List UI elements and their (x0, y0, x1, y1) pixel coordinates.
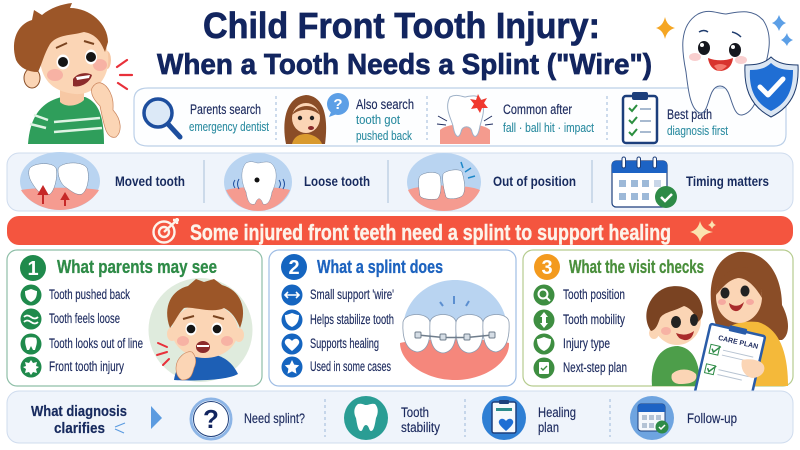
bullet: tooth looks out of line (20, 334, 143, 354)
text: parents search (189, 102, 269, 134)
icon: loose tooth (224, 153, 292, 211)
icon: pain lines (117, 60, 132, 89)
label: moved tooth: Moved tooth (115, 173, 185, 189)
icon: out of position tooth (407, 153, 481, 211)
bullet: supports healing (282, 334, 379, 354)
icon: healing plan (482, 396, 526, 440)
bullet: used in some cases: Used in some cases (310, 359, 391, 374)
illustration: boy holding cheek (14, 3, 120, 144)
bullet: injury type: Injury type (563, 336, 610, 351)
label: healing plan: plan (538, 420, 559, 435)
text: common after (503, 102, 594, 135)
panel 2: what a splint does (269, 250, 516, 386)
text: best path: Best path (667, 107, 712, 122)
text: common after: Common after (503, 102, 572, 117)
icon: checklist clipboard (623, 92, 657, 143)
icon: tooth mascot with shield (683, 11, 798, 117)
bullet: tooth position: Tooth position (563, 287, 625, 302)
heading (31, 403, 127, 437)
text: parents search: Parents search (190, 102, 261, 117)
illustration: splinted teeth (400, 280, 509, 380)
label: tooth stability: Tooth (401, 405, 429, 420)
banner (7, 216, 793, 245)
illustration: worried mother with question bubble (284, 93, 349, 144)
label: loose tooth: Loose tooth (304, 173, 370, 189)
title: When a Tooth Needs a Splint ("Wire") (157, 49, 652, 81)
illustration: worried mother with question bubble: ? (333, 96, 343, 113)
illustration: mother and child with care plan: CARE PLAN (717, 335, 759, 351)
icon: moved tooth (20, 152, 100, 210)
text: also search: tooth got (356, 112, 400, 127)
text: best path (667, 107, 728, 138)
illustration: boy with tooth injury (148, 278, 252, 382)
bullet: used in some cases (282, 356, 391, 378)
panel 1: what parents may see (7, 250, 262, 386)
badge 2: 2 (288, 257, 300, 279)
banner message: Some injured front teeth need a splint to support healing (190, 220, 671, 245)
badge 3: 3 (541, 257, 553, 279)
bullet: helps stabilize tooth: Helps stabilize tooth (310, 312, 394, 327)
icon: question (191, 399, 231, 439)
heading: What the visit checks (569, 257, 704, 277)
bullet: tooth pushed back: Tooth pushed back (49, 287, 130, 302)
icon: target (154, 218, 179, 242)
illustration: mother and child with care plan (646, 252, 788, 406)
label: follow-up: Follow-up (687, 411, 737, 426)
bullet: front tooth injury (20, 356, 124, 378)
icon: magnifier (144, 99, 180, 137)
label: out of position: Out of position (493, 173, 576, 189)
bullet: next-step plan (534, 358, 627, 378)
bullet: helps stabilize tooth (282, 310, 394, 330)
label: tooth stability: stability (401, 420, 440, 435)
text: also search (356, 97, 414, 143)
heading: What diagnosis (31, 403, 127, 420)
bullet: tooth mobility: Tooth mobility (563, 312, 625, 327)
panel: search and context strip (134, 88, 786, 146)
panel 3: what the visit checks (523, 250, 793, 406)
panel: signs strip (7, 152, 793, 211)
label: need splint: Need splint? (244, 411, 305, 426)
icon: impacted tooth (437, 94, 493, 144)
title (157, 5, 652, 81)
bullet: tooth feels loose: Tooth feels loose (49, 311, 120, 326)
icon: sparkles (656, 15, 793, 46)
icon: tooth (344, 396, 388, 440)
heading: What parents may see (57, 257, 217, 277)
bullet: next-step plan: Next-step plan (563, 360, 627, 375)
bullet: tooth position (534, 284, 625, 306)
icon: question: ? (203, 404, 219, 434)
label: healing plan: Healing (538, 405, 576, 420)
text: also search: Also search (356, 97, 414, 112)
bullet: injury type (534, 334, 610, 354)
bullet: tooth mobility (534, 310, 625, 330)
label: tooth stability (401, 405, 440, 435)
text: also search: pushed back (356, 128, 412, 143)
label: healing plan (538, 405, 576, 435)
icon: arrow (151, 406, 162, 429)
bullet: tooth pushed back (20, 284, 130, 306)
bullet: small support wire (282, 284, 394, 306)
text: parents search: emergency dentist (189, 119, 269, 134)
badge 1 (20, 255, 46, 281)
heading: clarifies (54, 420, 105, 437)
title: Child Front Tooth Injury: (203, 5, 600, 46)
icon: follow-up calendar (630, 396, 674, 440)
bullet: tooth feels loose (20, 308, 120, 330)
bullet: tooth looks out of line: Tooth looks out of line (49, 336, 143, 351)
text: best path: diagnosis first (667, 123, 728, 138)
text: common after: fall · ball hit · impact (503, 120, 594, 135)
bullet: front tooth injury: Front tooth injury (49, 359, 124, 374)
badge 3 (534, 254, 560, 280)
icon: sparkle (690, 220, 716, 242)
label: timing matters: Timing matters (686, 173, 769, 189)
icon: calendar with check (612, 157, 677, 208)
badge 2 (281, 254, 307, 280)
heading: What a splint does (317, 257, 443, 277)
panel: what diagnosis clarifies (7, 391, 793, 443)
badge 1: 1 (27, 258, 39, 280)
bullet: small support wire: Small support 'wire' (310, 287, 394, 302)
bullet: supports healing: Supports healing (310, 336, 379, 351)
